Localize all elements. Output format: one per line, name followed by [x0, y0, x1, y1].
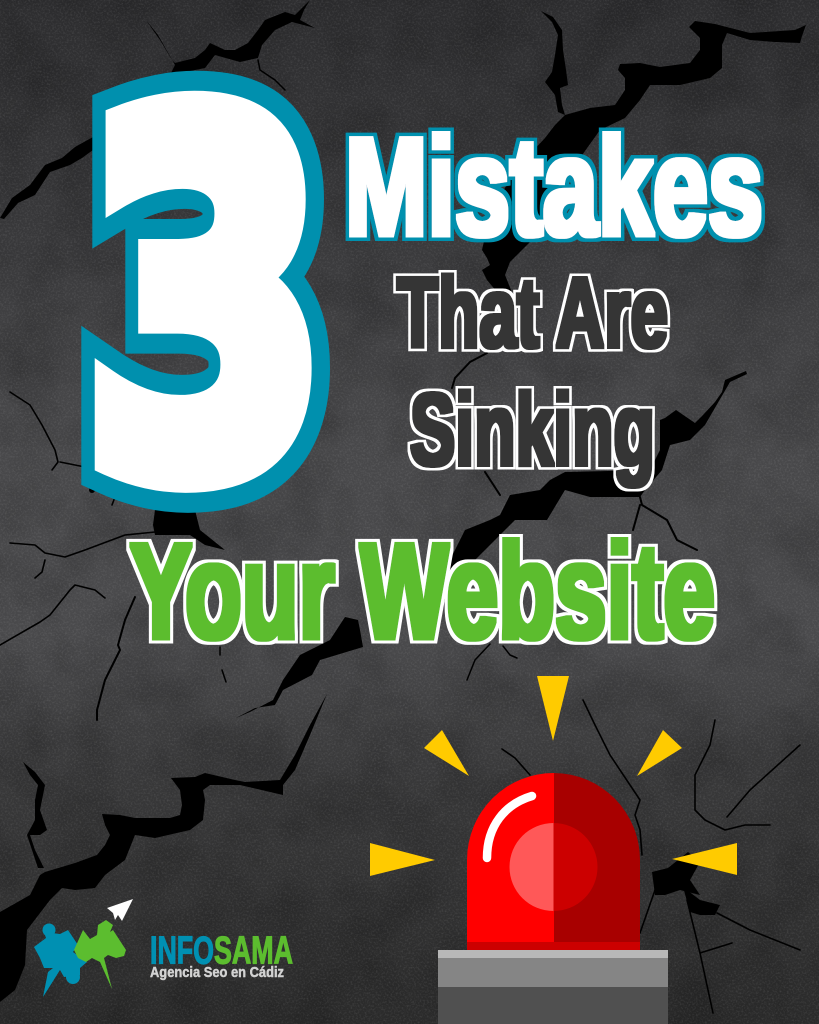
- big number 3: 3: [85, 20, 330, 583]
- beacon dome: [467, 773, 640, 950]
- logo tagline: Agencia Seo en Cádiz: [150, 965, 284, 981]
- icon: red alarm beacon: [370, 676, 737, 1024]
- big number 3: 3: [84, 20, 326, 583]
- beacon base: [438, 950, 668, 1024]
- heading: Sinking: Sinking: [410, 372, 655, 487]
- logo: Infosama: [34, 899, 293, 997]
- icon: blue puzzle piece: [34, 924, 87, 997]
- icon: green puzzle piece: [74, 920, 126, 989]
- logo wordmark: INFOSAMA: [150, 930, 293, 972]
- heading: That Are: That Are: [397, 257, 668, 369]
- beacon rays: [370, 676, 737, 876]
- icon: paper plane: [107, 899, 133, 921]
